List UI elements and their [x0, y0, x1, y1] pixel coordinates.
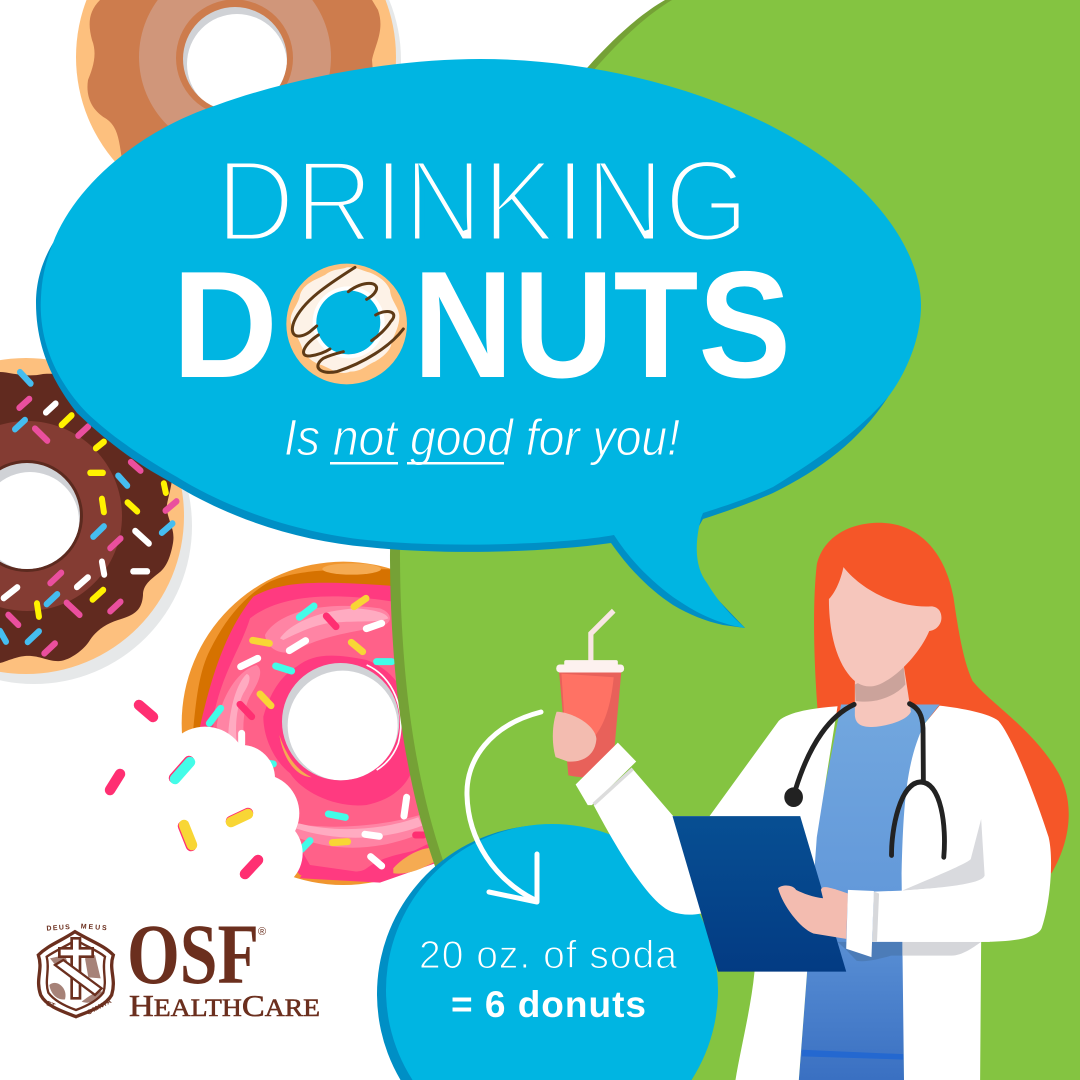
doctor	[553, 523, 1069, 1080]
scrub hem	[802, 1050, 903, 1060]
title: DONUTS: D	[172, 240, 278, 410]
straw	[591, 611, 614, 661]
logo shield: ET	[45, 1000, 56, 1010]
pink donut	[182, 562, 434, 885]
callout: soda equals donuts	[419, 934, 677, 1025]
green background shape	[390, 0, 1080, 1080]
arrow	[467, 712, 541, 902]
callout: soda equals donuts: 20 oz. of soda	[419, 934, 677, 977]
speech bubble	[36, 59, 921, 628]
cup highlight	[561, 674, 614, 735]
sleeve shadow	[902, 942, 981, 956]
clipboard	[673, 816, 846, 972]
bottom circle	[377, 824, 718, 1080]
icon: iced donut letter O	[286, 264, 407, 384]
title: DONUTS: NUTS	[413, 240, 791, 410]
registered mark: ®	[258, 926, 266, 938]
caramel donut	[76, 0, 401, 162]
hand on clipboard	[778, 886, 848, 939]
logo: OSF HealthCare	[38, 906, 320, 1023]
hair	[814, 523, 1069, 874]
logo subline: HEALTH CARE	[129, 988, 320, 1023]
coat fold shadow	[902, 819, 985, 891]
raised cuff	[576, 743, 636, 805]
callout: soda equals donuts: = 6 donuts	[451, 984, 646, 1025]
scrubs shadow	[838, 942, 902, 961]
coat right	[902, 706, 1051, 1080]
bite mark	[147, 727, 303, 893]
title: DONUTS	[172, 240, 791, 410]
scrubs	[799, 704, 940, 1080]
hand on cup	[553, 712, 596, 762]
falling sprinkles	[110, 705, 258, 874]
forearm	[872, 884, 990, 942]
stethoscope	[787, 704, 944, 857]
chocolate donut	[0, 358, 192, 684]
face	[829, 567, 941, 686]
title: DRINKING: DRINKING	[216, 136, 749, 266]
logo shield	[38, 923, 113, 1017]
subtitle: Is not good for you!	[284, 409, 680, 466]
cup	[559, 672, 621, 778]
logo shield: MEUS	[81, 923, 107, 932]
logo shield: OMNIA	[86, 998, 113, 1017]
chocolate donut sprinkles	[0, 372, 176, 653]
logo shield: DEUS	[46, 924, 70, 933]
neck	[855, 663, 911, 727]
logo wordmark: OSF	[127, 906, 259, 1002]
cup lid	[556, 660, 624, 672]
pink donut sprinkles	[209, 598, 423, 866]
coat left	[594, 706, 838, 1080]
cuff	[846, 890, 874, 957]
cuff right	[872, 892, 879, 942]
